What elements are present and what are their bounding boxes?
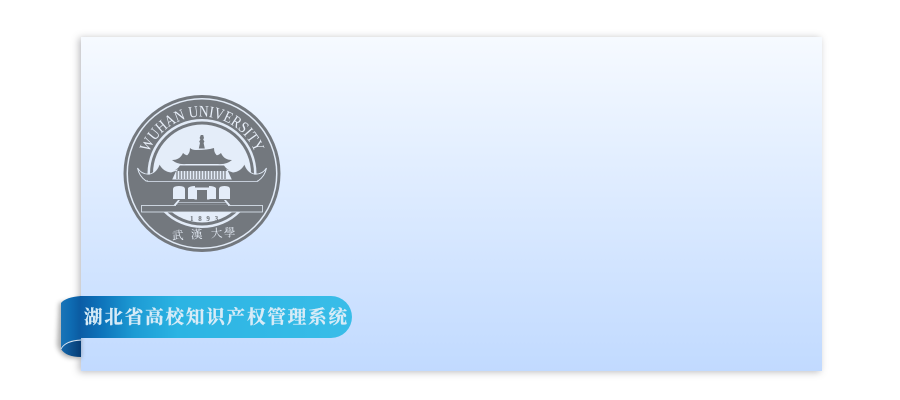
ribbon fold [61, 340, 81, 357]
panel: gradient card [81, 37, 822, 371]
logo: Wuhan University seal [124, 95, 280, 252]
door [194, 188, 210, 200]
main hall roof [174, 166, 230, 171]
finial [199, 135, 205, 148]
seal rings [124, 95, 280, 252]
arches [173, 186, 230, 199]
hall wall [148, 180, 257, 206]
ribbon banner [57, 296, 352, 358]
left pavilion [138, 164, 177, 181]
stairs [172, 200, 232, 208]
seal text: WUHAN UNIVERSITY [139, 106, 264, 150]
platform [142, 206, 262, 212]
year: 1893 [190, 215, 223, 223]
colonnade [176, 171, 228, 179]
right pavilion [227, 164, 266, 181]
ribbon shadow [57, 298, 81, 358]
calligraphy: 武漢大學 [172, 225, 236, 243]
ribbon curl [61, 296, 81, 348]
ribbon body [80, 296, 352, 338]
building [138, 135, 266, 212]
upper roof [186, 148, 218, 156]
ribbon title: 湖北省高校知识产权管理系统 [84, 304, 348, 330]
